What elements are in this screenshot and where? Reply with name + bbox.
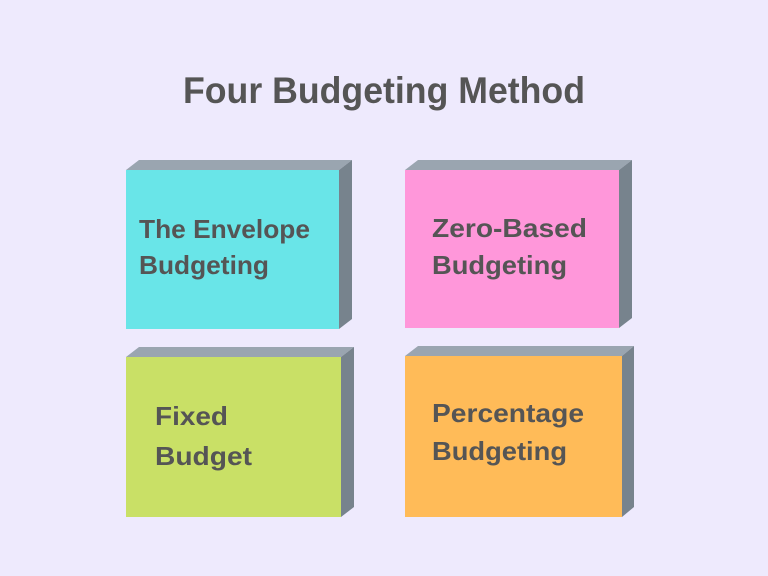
title: Four Budgeting Method <box>183 70 585 111</box>
box: fixed budget: Budget <box>155 441 252 471</box>
box: zero-based budgeting: Budgeting <box>432 250 567 280</box>
box: envelope budgeting: Budgeting <box>139 250 269 280</box>
box: fixed budget <box>126 347 354 517</box>
box: fixed budget: Fixed <box>155 401 228 431</box>
box: zero-based budgeting: Zero-Based <box>432 213 587 243</box>
box: percentage budgeting: Budgeting <box>432 436 567 466</box>
box: envelope budgeting <box>126 160 352 329</box>
box: percentage budgeting: Percentage <box>432 398 584 428</box>
box: zero-based budgeting <box>405 160 632 328</box>
box: percentage budgeting <box>405 346 634 517</box>
box: envelope budgeting: The Envelope <box>139 214 310 244</box>
